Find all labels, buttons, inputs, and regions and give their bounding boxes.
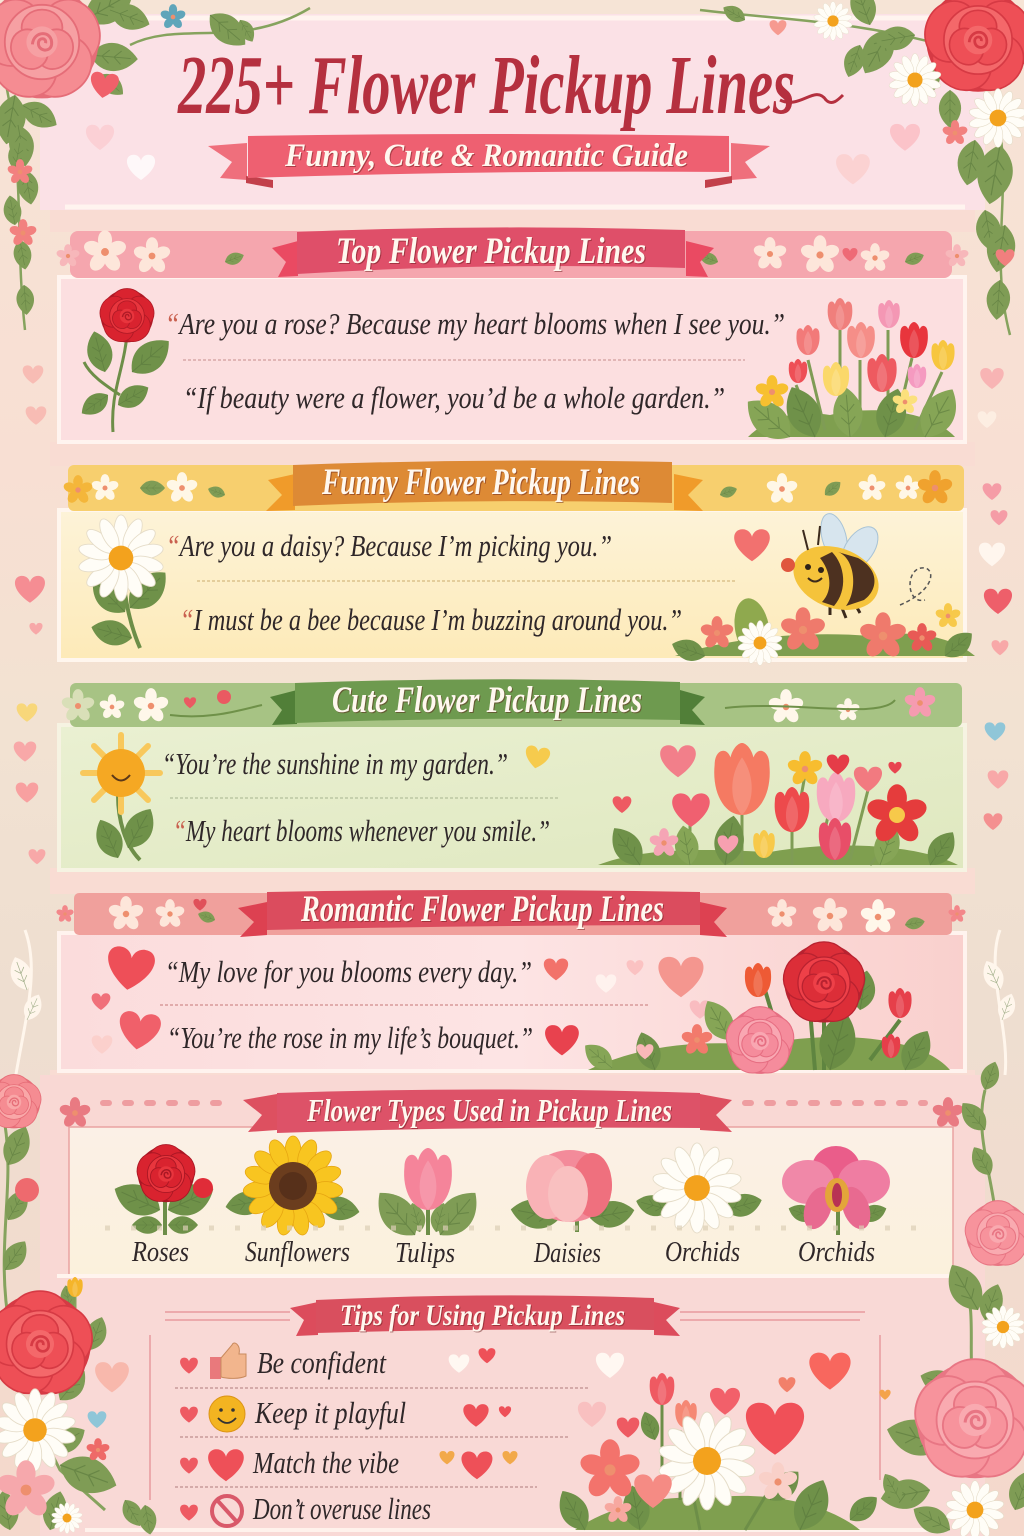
item: orchids	[782, 1146, 890, 1268]
icon: sunshine flower	[83, 735, 162, 863]
icon: heart	[734, 529, 770, 561]
icon: yellow heart	[523, 745, 551, 770]
illustration: flower patch	[669, 596, 978, 666]
quote: daisy: “Are you a daisy? Because I’m picking you.”	[166, 528, 612, 563]
heading text: Flower Types Used in Pickup Lines	[306, 1092, 672, 1128]
illustration: bee	[781, 511, 931, 621]
icons: hearts right	[544, 957, 710, 1055]
heading ribbon	[272, 227, 714, 277]
quote: bee: “I must be a bee because I’m buzzing around you.”	[180, 602, 682, 637]
subtitle text: Funny, Cute & Romantic Guide	[284, 138, 688, 174]
heading ribbon	[270, 679, 705, 725]
section body	[59, 933, 965, 1071]
section band	[60, 683, 962, 727]
section gap tint	[50, 208, 975, 1092]
tip: be confident	[180, 1343, 387, 1380]
item: sunflowers	[224, 1136, 361, 1268]
tip: keep it playful: Keep it playful	[254, 1395, 406, 1430]
panel: top flower pickup lines	[56, 227, 969, 449]
label: orchids: Orchids	[665, 1236, 740, 1268]
label: daisies: Daisies	[533, 1237, 601, 1269]
tips hearts	[439, 1348, 624, 1479]
section body	[59, 510, 965, 660]
label: roses: Roses	[131, 1236, 189, 1268]
label: tulips: Tulips	[395, 1237, 455, 1269]
item: daisies	[508, 1150, 637, 1269]
ground speckles	[105, 1226, 930, 1230]
tip: be confident: Be confident	[257, 1345, 387, 1380]
corner decoration: top left rose and vine	[0, 0, 310, 330]
heading ribbon	[266, 461, 703, 511]
heading text: Funny Flower Pickup Lines	[321, 462, 640, 503]
section band	[62, 465, 964, 511]
section backdrop	[40, 1075, 985, 1280]
tip: don't overuse lines	[180, 1491, 431, 1526]
heading decoration	[58, 1097, 965, 1129]
quote: beauty: “If beauty were a flower, you’d be a whole garden.”	[183, 380, 725, 415]
quote: smile: “My heart blooms whenever you smile.”	[173, 813, 550, 848]
illustration: tulip bouquet	[738, 298, 966, 449]
label: sunflowers: Sunflowers	[245, 1236, 350, 1268]
heading ribbon	[243, 1090, 732, 1133]
quote: rose: “Are you a rose? Because my heart blooms when I see you.”	[165, 306, 785, 341]
corner decoration: top right rose and daisies	[700, 0, 1024, 335]
panel: tips	[40, 1280, 985, 1536]
quote: sunshine: “You’re the sunshine in my garden.”	[162, 746, 508, 781]
heading ribbon	[238, 889, 727, 937]
section border	[150, 1312, 880, 1500]
quote: love: “My love for you blooms every day.”	[165, 954, 532, 989]
item: daisy labelled orchids	[634, 1143, 765, 1268]
section body	[59, 725, 965, 870]
heading text: Tips for Using Pickup Lines	[340, 1299, 625, 1332]
subtitle ribbon	[208, 134, 770, 188]
tip: match the vibe: Match the vibe	[252, 1445, 399, 1480]
item: tulips	[367, 1148, 488, 1269]
icon: smiley	[209, 1396, 245, 1432]
section backdrop	[40, 1280, 985, 1536]
panel: flower types	[40, 1075, 985, 1280]
icon: daisy	[77, 515, 176, 650]
panel: funny flower pickup lines	[59, 461, 978, 666]
section body	[69, 1127, 953, 1277]
section body	[59, 277, 965, 442]
icon: no sign	[212, 1496, 242, 1526]
icons: hearts left	[92, 945, 162, 1054]
header panel	[40, 14, 985, 210]
item: roses	[109, 1145, 219, 1268]
heading text: Cute Flower Pickup Lines	[332, 680, 642, 721]
section band	[56, 893, 966, 935]
heading text: Romantic Flower Pickup Lines	[300, 889, 664, 930]
title swash	[780, 95, 843, 103]
heading text: Top Flower Pickup Lines	[336, 231, 646, 272]
illustration: roses bouquet	[579, 942, 950, 1080]
tip: keep it playful	[180, 1395, 406, 1432]
left margin hearts and vines	[5, 483, 1019, 1080]
corner decoration: bottom left flowers	[0, 1075, 159, 1536]
section band	[56, 230, 969, 278]
icon: thumbs up	[210, 1343, 246, 1379]
tip: match the vibe	[180, 1445, 399, 1481]
heading ribbon	[290, 1295, 680, 1336]
panel: romantic flower pickup lines	[56, 889, 966, 1080]
illustration: tulips and hearts	[598, 743, 963, 873]
tip: don't overuse lines: Don’t overuse lines	[252, 1491, 431, 1526]
panel: cute flower pickup lines	[59, 679, 965, 873]
header decoration: hearts	[23, 124, 1004, 428]
quote: bouquet: “You’re the rose in my life’s bouquet.”	[167, 1020, 533, 1055]
corner decoration: bottom right flowers	[877, 1059, 1024, 1536]
illustration: daisy bouquet	[551, 1353, 883, 1536]
icon: rose	[76, 289, 178, 432]
label: orchids second: Orchids	[798, 1236, 875, 1268]
